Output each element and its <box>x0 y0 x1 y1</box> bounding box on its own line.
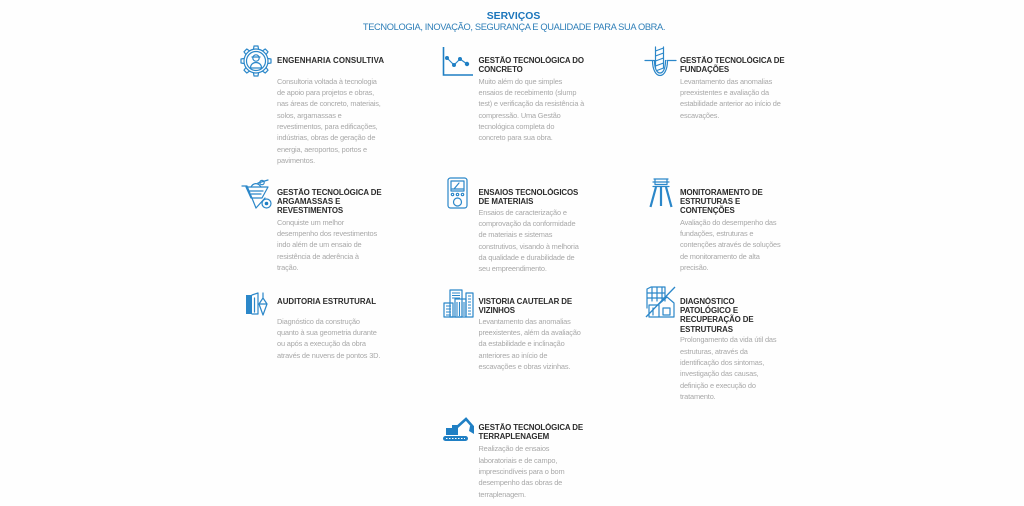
heading: GESTÃO TECNOLÓGICA DE <box>478 423 583 432</box>
heading <box>277 188 382 215</box>
text block: tecnológica completa do <box>478 122 554 131</box>
text block: preexistentes e avaliação da <box>680 88 769 97</box>
text block: escavações. <box>680 111 719 120</box>
text block: Levantamento das anomalias <box>478 317 571 326</box>
heading: CONCRETO <box>478 65 523 74</box>
text block: resistência de aderência à <box>277 252 359 261</box>
heading: VIZINHOS <box>478 306 515 315</box>
text block <box>277 77 381 165</box>
text block: ensaios de recebimento (slump <box>478 88 576 97</box>
panel: gestão tecnológica de argamassas e revestimentos <box>241 179 382 272</box>
heading: GESTÃO TECNOLÓGICA DO <box>478 56 584 65</box>
text block: Ensaios de caracterização e <box>478 208 567 217</box>
panel: diagnóstico patológico e recuperação de estruturas <box>646 286 776 401</box>
text block: estabilidade anterior ao início de <box>680 99 781 108</box>
text block: energia, aeroportos, portos e <box>277 145 367 154</box>
heading: REVESTIMENTOS <box>277 206 343 215</box>
text block: escavações e obras vizinhas. <box>478 362 570 371</box>
heading: DE MATERIAIS <box>478 197 533 206</box>
icon: wheelbarrow <box>241 179 272 209</box>
text block: investigação das causas, <box>680 369 758 378</box>
text block: Realização de ensaios <box>478 444 549 453</box>
heading: ENGENHARIA CONSULTIVA <box>277 56 384 65</box>
title: SERVIÇOS <box>487 10 540 22</box>
text block: desempenho dos revestimentos <box>277 229 377 238</box>
icon: testing device <box>447 177 468 209</box>
heading: GESTÃO TECNOLÓGICA DE <box>277 188 382 197</box>
icon: surveying tripod <box>650 178 672 208</box>
panel: vistoria cautelar de vizinhos <box>443 289 581 371</box>
heading <box>680 56 785 74</box>
text block: de apoio para projetos e obras, <box>277 88 374 97</box>
text block <box>680 335 776 401</box>
heading: VISTORIA CAUTELAR DE <box>478 297 572 306</box>
subtitle: TECNOLOGIA, INOVAÇÃO, SEGURANÇA E QUALIDADE PARA SUA OBRA. <box>363 22 665 32</box>
text block: de materiais e sistemas <box>478 230 552 239</box>
panel: ensaios tecnológicos de materiais <box>447 177 579 273</box>
text block: da qualidade e durabilidade de <box>478 253 574 262</box>
icon: foundation drill <box>644 46 677 76</box>
heading <box>478 423 583 441</box>
panel: monitoramento de estruturas e contenções <box>650 178 780 272</box>
text block: test) e verificação da resistência à <box>478 99 584 108</box>
heading: ENSAIOS TECNOLÓGICOS <box>478 188 578 197</box>
text block: precisão. <box>680 263 708 272</box>
heading: TERRAPLENAGEM <box>478 432 549 441</box>
heading: PATOLÓGICO E <box>680 306 738 315</box>
panel: auditoria estrutural <box>246 292 380 360</box>
heading <box>478 56 584 74</box>
text block: desempenho das obras de <box>478 478 562 487</box>
text block: contenções através de soluções <box>680 240 780 249</box>
heading <box>680 188 763 215</box>
text block: estruturas, através da <box>680 347 748 356</box>
text block: solos, argamassas e <box>277 111 342 120</box>
heading: ESTRUTURAS E <box>680 197 740 206</box>
text block: concreto para sua obra. <box>478 133 553 142</box>
text block: Prolongamento da vida útil das <box>680 335 776 344</box>
text block: identificação dos sintomas, <box>680 358 764 367</box>
panel: gestão tecnológica do concreto <box>442 47 584 142</box>
text block: Muito além do que simples <box>478 77 562 86</box>
text block: indústrias, obras de geração de <box>277 133 375 142</box>
text block: nas áreas de concreto, materiais, <box>277 99 381 108</box>
heading <box>680 297 754 334</box>
text block: Diagnóstico da construção <box>277 317 360 326</box>
text block: Consultoria voltada à tecnologia <box>277 77 377 86</box>
heading: CONTENÇÕES <box>680 206 735 215</box>
text block: tração. <box>277 263 298 272</box>
icon: city buildings <box>443 289 474 318</box>
icon: excavator <box>443 417 474 441</box>
text block: de monitoramento de alta <box>680 252 760 261</box>
heading: ESTRUTURAS <box>680 325 733 334</box>
text block <box>478 208 579 273</box>
text block: seu empreendimento. <box>478 264 547 273</box>
text block: comprovação da conformidade <box>478 219 575 228</box>
text block <box>680 218 780 272</box>
heading: RECUPERAÇÃO DE <box>680 315 754 324</box>
heading: AUDITORIA ESTRUTURAL <box>277 297 376 306</box>
text block: laboratoriais e de campo, <box>478 456 557 465</box>
text block: construtivos, visando à melhoria <box>478 242 579 251</box>
icon: building and plumb bob <box>246 292 268 316</box>
text block: anteriores ao início de <box>478 351 547 360</box>
text block: fundações, estruturas e <box>680 229 753 238</box>
heading: FUNDAÇÕES <box>680 65 729 74</box>
text block: preexistentes, além da avaliação <box>478 328 581 337</box>
text block: através de nuvens de pontos 3D. <box>277 351 380 360</box>
text block <box>680 77 781 120</box>
heading: MONITORAMENTO DE <box>680 188 763 197</box>
heading <box>478 188 578 206</box>
heading <box>478 297 572 315</box>
text block: ou após a execução da obra <box>277 339 366 348</box>
text block: da estabilidade e inclinação <box>478 339 565 348</box>
text block: Conquiste um melhor <box>277 218 344 227</box>
text block <box>277 218 377 272</box>
text block: imprescindíveis para o bom <box>478 467 564 476</box>
text block <box>478 444 564 499</box>
text block: pavimentos. <box>277 156 315 165</box>
text block: compressão. Uma Gestão <box>478 111 561 120</box>
text block: Avaliação do desempenho das <box>680 218 776 227</box>
panel: engenharia consultiva <box>240 45 384 165</box>
text block: Levantamento das anomalias <box>680 77 772 86</box>
text block <box>478 77 584 142</box>
text block <box>277 317 380 360</box>
text block: revestimentos, para edificações, <box>277 122 378 131</box>
icon: gear with engineer <box>240 45 272 77</box>
text block: tratamento. <box>680 392 716 401</box>
heading: GESTÃO TECNOLÓGICA DE <box>680 56 785 65</box>
text block <box>478 317 581 371</box>
heading: ARGAMASSAS E <box>277 197 340 206</box>
icon: crossed-out buildings <box>646 286 676 318</box>
panel: gestão tecnológica de fundações <box>644 46 785 120</box>
text block: indo além de um ensaio de <box>277 240 362 249</box>
text block: quanto à sua geometria durante <box>277 328 377 337</box>
icon: line chart <box>442 47 473 76</box>
heading: DIAGNÓSTICO <box>680 297 735 306</box>
text block: definição e execução do <box>680 381 756 390</box>
text block: terraplenagem. <box>478 490 526 499</box>
panel: gestão tecnológica de terraplenagem <box>443 417 583 499</box>
